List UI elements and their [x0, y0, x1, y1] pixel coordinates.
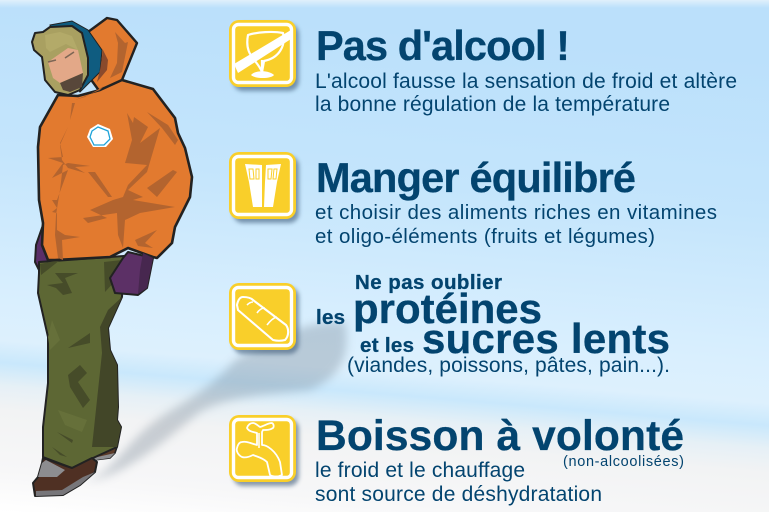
body line 2: et oligo-éléments (fruits et légumes) — [315, 225, 655, 248]
label les: les — [316, 306, 345, 329]
jacket — [38, 80, 192, 260]
body line 1: et choisir des aliments riches en vitamines — [315, 201, 717, 224]
purple glove — [110, 252, 153, 295]
trouser shaded leg — [92, 297, 122, 447]
beard — [60, 73, 83, 92]
note: (non-alcoolisées) — [563, 454, 684, 470]
body line 1: le froid et le chauffage — [315, 459, 525, 482]
jacket badge — [87, 124, 113, 147]
hood lining — [50, 21, 102, 92]
body line 1: L'alcool fausse la sensation de froid et altère — [315, 70, 737, 93]
heading: Manger équilibré — [316, 154, 636, 201]
heading proteins: protéines — [353, 285, 542, 332]
icon: no alcohol — [229, 20, 299, 91]
left glove — [35, 225, 50, 272]
section: no alcohol — [315, 22, 737, 116]
trousers — [38, 256, 124, 468]
icon: water tap — [229, 415, 299, 486]
section: drinks — [315, 413, 684, 506]
examples: (viandes, poissons, pâtes, pain...). — [347, 354, 670, 377]
body line 2: sont source de déshydratation — [315, 483, 602, 506]
section: balanced diet — [315, 154, 717, 248]
label et les: et les — [360, 334, 414, 357]
intro: Ne pas oublier — [355, 271, 502, 294]
heading: Pas d'alcool ! — [316, 22, 570, 69]
hood — [84, 18, 137, 92]
face fur — [32, 26, 88, 95]
character in orange parka — [32, 18, 192, 496]
heading: Boisson à volonté — [316, 413, 684, 460]
front boot — [33, 458, 97, 496]
icon: bread — [229, 283, 299, 354]
body line 2: la bonne régulation de la température — [315, 93, 670, 116]
jacket folds — [48, 86, 178, 260]
figure shadow on the snow — [85, 322, 347, 482]
icon: balanced meal — [229, 152, 299, 223]
section: proteins and slow sugars — [316, 271, 670, 377]
rear boot — [92, 447, 117, 460]
face — [48, 48, 83, 83]
heading slow sugars: sucres lents — [422, 315, 670, 362]
